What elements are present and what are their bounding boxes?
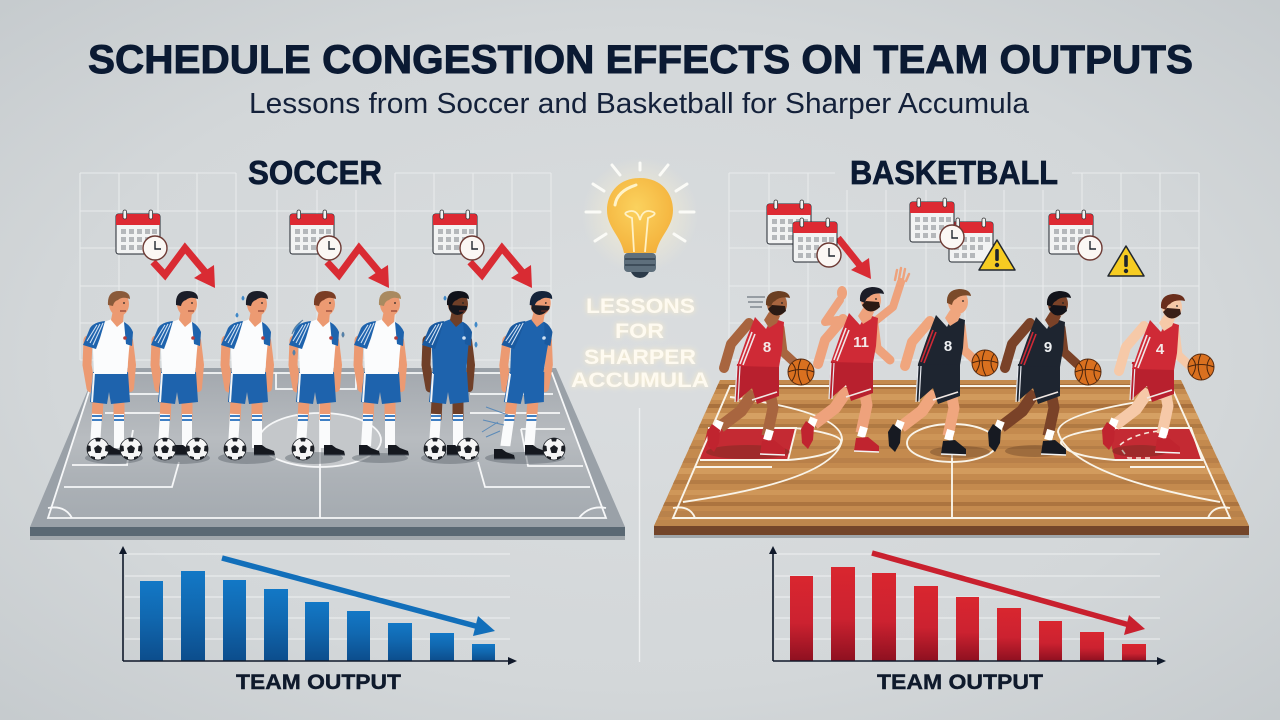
player: black 8: 8 bbox=[944, 338, 952, 355]
soccer ball and boot shadows bbox=[85, 452, 565, 464]
callout: lessons for sharper accumula: SHARPER bbox=[584, 346, 696, 369]
bar chart: basketball team output bbox=[769, 546, 1166, 665]
icon: calendar, clock and falling arrow 3 bbox=[433, 210, 532, 288]
icon: calendar with warning bbox=[1049, 210, 1144, 276]
icon: light bulb bbox=[582, 157, 698, 278]
icon: calendar, clock and falling arrow 1 bbox=[116, 210, 215, 288]
player: red 8 bbox=[707, 291, 814, 455]
schedule icons: soccer bbox=[116, 210, 532, 288]
panel: basketball court bbox=[650, 380, 1254, 538]
callout: lessons for sharper accumula: ACCUMULA bbox=[571, 369, 709, 392]
bars: soccer bbox=[140, 571, 495, 661]
callout: lessons for sharper accumula bbox=[571, 295, 709, 392]
player: black 9: 9 bbox=[1044, 339, 1052, 356]
player: black 8 bbox=[888, 289, 998, 455]
icon: double calendar with warning bbox=[910, 198, 1015, 270]
soccer players bbox=[83, 291, 565, 460]
panel: soccer pitch bbox=[30, 368, 625, 540]
icon: double calendar with falling arrow bbox=[767, 200, 871, 279]
subtitle: Lessons from Soccer and Basketball for Sharper Accumula bbox=[249, 88, 1030, 120]
player: red 4: 4 bbox=[1156, 341, 1165, 358]
trend arrow: basketball bbox=[872, 553, 1145, 635]
title: SCHEDULE CONGESTION EFFECTS ON TEAM OUTPUTS bbox=[88, 38, 1193, 82]
player 4 bbox=[289, 291, 345, 460]
bars: basketball bbox=[790, 567, 1146, 661]
heading: soccer: SOCCER bbox=[248, 154, 382, 191]
player 1 bbox=[83, 291, 142, 460]
player 3 bbox=[221, 291, 275, 460]
player 5 bbox=[354, 291, 409, 455]
callout: lessons for sharper accumula: LESSONS bbox=[586, 295, 695, 318]
trend arrow: soccer bbox=[222, 558, 495, 636]
player: red 4 bbox=[1102, 294, 1214, 453]
callout: lessons for sharper accumula: FOR bbox=[615, 320, 664, 343]
chart label: basketball: TEAM OUTPUT bbox=[877, 671, 1043, 694]
center divider bbox=[638, 408, 640, 662]
player 2 bbox=[151, 291, 208, 460]
bar chart: soccer team output bbox=[119, 546, 517, 665]
player: red 11 arms raised: 11 bbox=[853, 334, 869, 351]
icon: calendar, clock and falling arrow 2 bbox=[290, 210, 389, 288]
player 7 bbox=[482, 291, 565, 460]
chart label: soccer: TEAM OUTPUT bbox=[236, 671, 401, 694]
player 6 bbox=[422, 291, 479, 460]
basketball shadows bbox=[706, 445, 1168, 459]
player: black 9 bbox=[988, 291, 1101, 455]
player: red 8: 8 bbox=[763, 339, 771, 356]
heading: basketball: BASKETBALL bbox=[850, 154, 1058, 191]
basketball players bbox=[707, 268, 1214, 455]
schedule icons: basketball bbox=[767, 198, 1144, 279]
player: red 11 arms raised bbox=[801, 268, 909, 452]
